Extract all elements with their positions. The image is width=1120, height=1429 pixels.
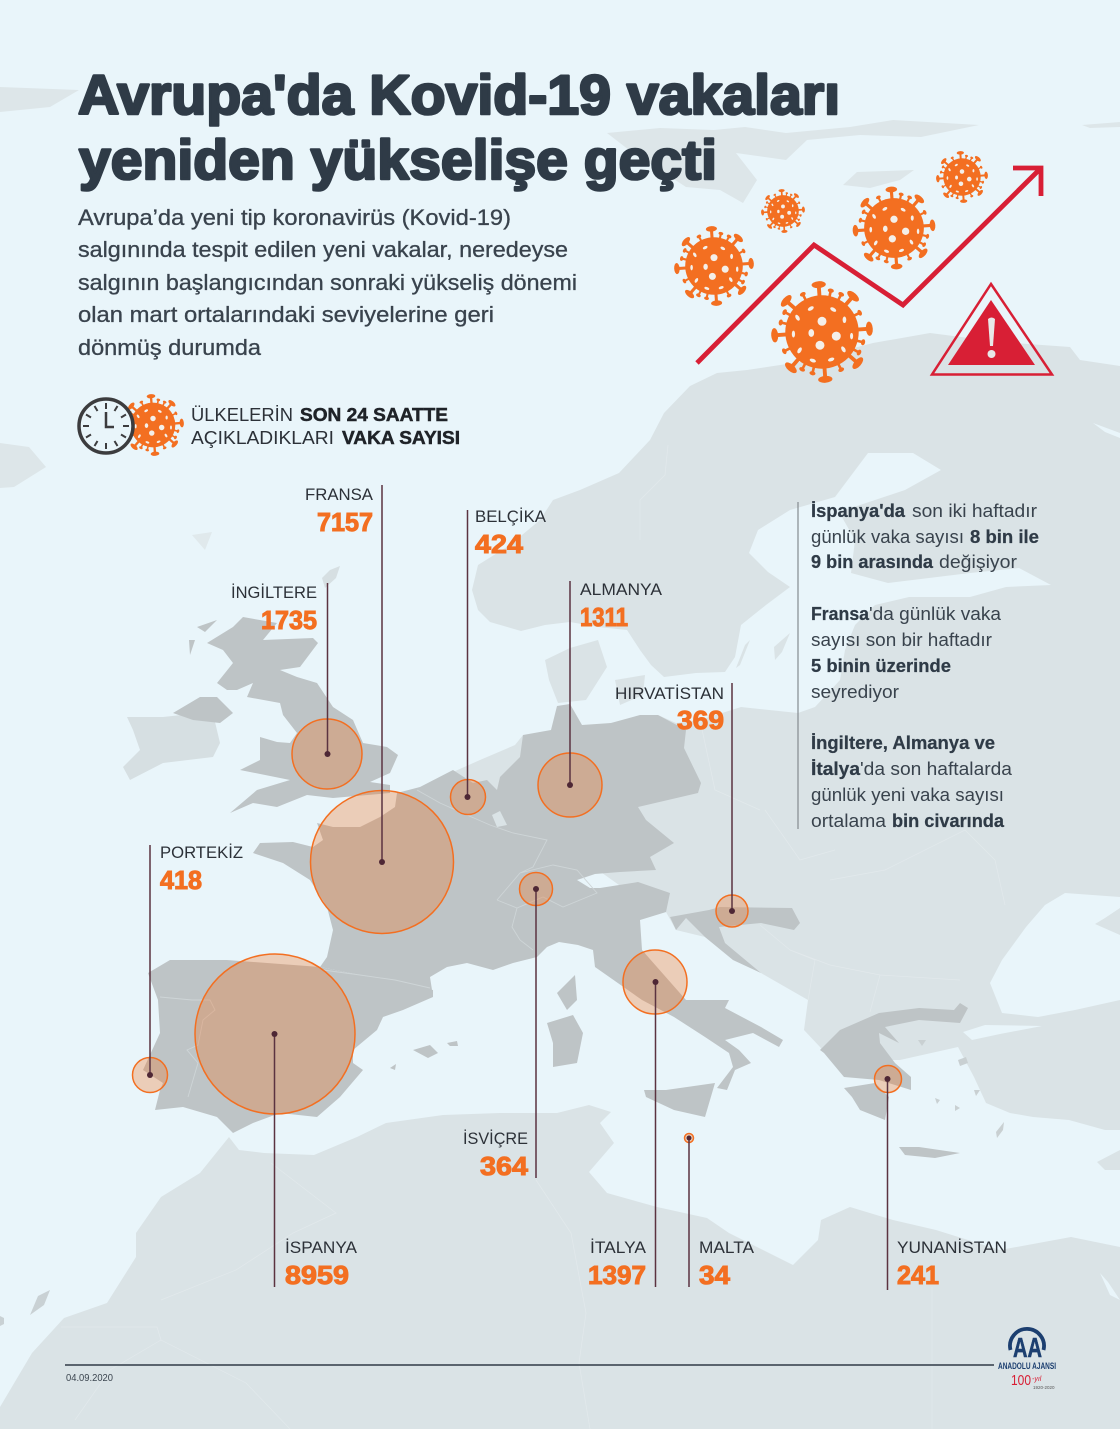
map: Svalbard and Arctic islands [0, 87, 1120, 488]
logo: Anadolu Ajansı: -yıl [1032, 1376, 1042, 1383]
label: Portekiz: 418 [160, 867, 202, 895]
bubbles and leader lines [132, 485, 902, 1290]
note: İspanya: İspanya'da [811, 500, 906, 521]
map: Sicily [644, 1083, 715, 1117]
footer rule [65, 1364, 994, 1366]
label: Yunanistan: YUNANİSTAN [897, 1238, 1007, 1257]
logo: Anadolu Ajansı: 100 [1011, 1372, 1031, 1389]
intro text block [78, 205, 577, 360]
map: Aegean islands [918, 1040, 1004, 1138]
intro text block: dönmüş durumda [78, 335, 262, 360]
bubble: İtalya [623, 950, 687, 1287]
label: İsviçre: İSVİÇRE [463, 1129, 528, 1148]
note: İngiltere, Almanya, İtalya: İngiltere, Almanya ve [811, 732, 995, 753]
note: İspanya: günlük vaka sayısı [811, 526, 964, 547]
icon: virus 2 [761, 189, 805, 233]
map: borders on light land [61, 445, 1005, 1429]
logo: Anadolu Ajansı: 1920-2020 [1033, 1385, 1055, 1390]
bubble: Hırvatistan [716, 683, 748, 927]
note: Fransa: seyrediyor [811, 681, 899, 702]
label: İsviçre [463, 1129, 529, 1181]
label: Fransa: 7157 [317, 509, 373, 537]
label: Portekiz: PORTEKİZ [160, 843, 243, 862]
label: İtalya [588, 1238, 646, 1290]
map: Greece [820, 1003, 968, 1158]
map: Spain and Portugal [143, 960, 433, 1133]
map: light land (northern and eastern Europe) [453, 333, 1120, 1130]
map: Sardinia [547, 1015, 583, 1067]
note: İspanya: değişiyor [939, 551, 1017, 572]
label: İspanya [285, 1238, 357, 1290]
note: İngiltere, Almanya, İtalya: günlük yeni vaka sayısı [811, 784, 1004, 805]
label: Yunanistan [897, 1238, 1007, 1290]
map: North Africa [0, 1105, 1120, 1429]
intro text block: salgınında tespit edilen yeni vakalar, neredeyse [78, 237, 568, 262]
label: İsviçre: 364 [480, 1153, 529, 1181]
label: Almanya: ALMANYA [580, 581, 662, 599]
icon: virus 4 [936, 151, 988, 203]
bubble: Malta [684, 1134, 694, 1287]
label: İngiltere [231, 583, 317, 635]
title [78, 63, 840, 191]
map: highlighted land France Belgium Germany Italy [253, 704, 783, 1090]
note: İspanya: 8 bin ile [970, 526, 1039, 547]
icon: virus 5 [771, 281, 873, 383]
label: İngiltere: 1735 [261, 607, 317, 635]
side notes [798, 500, 1039, 831]
map: Corsica [557, 975, 577, 1010]
map: Balearic islands [390, 1041, 458, 1070]
note: İspanya [811, 500, 1039, 572]
note: Fransa [811, 603, 1002, 702]
icon: warning sign [932, 284, 1052, 374]
illustration: viruses, rising arrow, warning sign [674, 151, 1052, 383]
bubble: İsviçre [520, 872, 552, 1178]
note: İngiltere, Almanya, İtalya: 'da son haftalarda [860, 758, 1013, 779]
map: Croatia [670, 907, 800, 973]
title: yeniden yükselişe geçti [79, 128, 717, 191]
arrow: rising trend [697, 168, 1041, 363]
icon: virus 1 [674, 226, 754, 306]
bubble: Yunanistan [874, 1066, 902, 1290]
map: borders on highlighted land [160, 790, 597, 1097]
label: Belçika: 424 [475, 531, 524, 559]
label: Belçika [475, 507, 546, 559]
label: Malta [699, 1239, 754, 1290]
intro text block: salgının başlangıcından sonraki yükseliş dönemi [78, 270, 577, 295]
legend text: AÇIKLADIKLARI [191, 427, 334, 448]
logo: Anadolu Ajansı: ANADOLU AJANSI [998, 1361, 1056, 1372]
icon: virus 3 [852, 186, 936, 270]
bubble: İngiltere [292, 583, 362, 789]
label: Malta: MALTA [699, 1239, 754, 1257]
bubble: Almanya [538, 581, 602, 817]
map: Luxembourg [492, 811, 507, 827]
label: İtalya: 1397 [588, 1262, 646, 1290]
label: Hırvatistan: HIRVATİSTAN [615, 684, 724, 703]
label: Hırvatistan [615, 684, 724, 735]
label: Yunanistan: 241 [897, 1262, 939, 1290]
note: İspanya: 9 bin arasında [811, 551, 934, 572]
label: Malta: 34 [699, 1262, 731, 1290]
label: İtalya: İTALYA [590, 1238, 646, 1257]
title: Avrupa'da Kovid-19 vakaları [78, 63, 840, 126]
logo: Anadolu Ajansı: AA [1013, 1332, 1042, 1363]
label: Fransa: FRANSA [305, 486, 373, 504]
map: Black Sea and Marmara [963, 893, 1120, 1040]
map: Denmark and Baltic islands [545, 633, 790, 705]
legend: clock and virus with heading [79, 394, 460, 456]
label: İspanya: İSPANYA [285, 1238, 357, 1257]
map: Canary islands and Red Sea [0, 1290, 50, 1326]
note: İngiltere, Almanya, İtalya: İtalya [811, 758, 861, 779]
label: İngiltere: İNGİLTERE [231, 583, 317, 602]
map: Faroe islands [192, 532, 212, 550]
map: Red Sea sliver [1100, 1273, 1120, 1300]
label: Hırvatistan: 369 [677, 707, 724, 735]
note: İngiltere, Almanya, İtalya [811, 732, 1013, 831]
note: İspanya: son iki haftadır [912, 500, 1037, 521]
legend text: ÜLKELERİN [191, 404, 293, 425]
bubble: İspanya [195, 954, 355, 1287]
bubble: Fransa [310, 485, 454, 934]
legend text: VAKA SAYISI [342, 427, 460, 448]
map: Crimea and Cyprus [1095, 908, 1120, 1170]
note: İngiltere, Almanya, İtalya: bin civarında [892, 810, 1005, 831]
legend text [191, 404, 460, 448]
intro text block: Avrupa’da yeni tip koronavirüs (Kovid-19) [78, 205, 511, 230]
footer date: 04.09.2020 [66, 1373, 113, 1384]
map: Northern Ireland and Scottish isles [173, 620, 233, 723]
note: Fransa: 5 binin üzerinde [811, 655, 951, 676]
note: Fransa: 'da günlük vaka [869, 603, 1002, 624]
label: Portekiz [160, 843, 243, 895]
icon: clock [79, 399, 133, 453]
map: White Sea sliver [1093, 423, 1120, 438]
intro text block: olan mart ortalarındaki seviyelerine geri [78, 302, 494, 327]
label: Almanya [580, 581, 662, 632]
logo: Anadolu Ajansı [998, 1329, 1056, 1390]
note: İngiltere, Almanya, İtalya: ortalama [811, 810, 887, 831]
label: İspanya: 8959 [285, 1262, 349, 1290]
note: Fransa: sayısı son bir haftadır [811, 629, 992, 650]
label: Belçika: BELÇİKA [475, 507, 546, 526]
map: Ireland, Faroe, Shetland [123, 566, 340, 780]
bubble: Belçika [450, 510, 486, 814]
map: Great Britain [207, 617, 398, 813]
note: Fransa: Fransa [811, 603, 870, 624]
label: Fransa [305, 486, 373, 537]
legend text: SON 24 SAATTE [300, 404, 448, 425]
bubble: Portekiz [132, 845, 168, 1092]
label: Almanya: 1311 [580, 604, 628, 632]
icon: legend virus [122, 394, 184, 456]
